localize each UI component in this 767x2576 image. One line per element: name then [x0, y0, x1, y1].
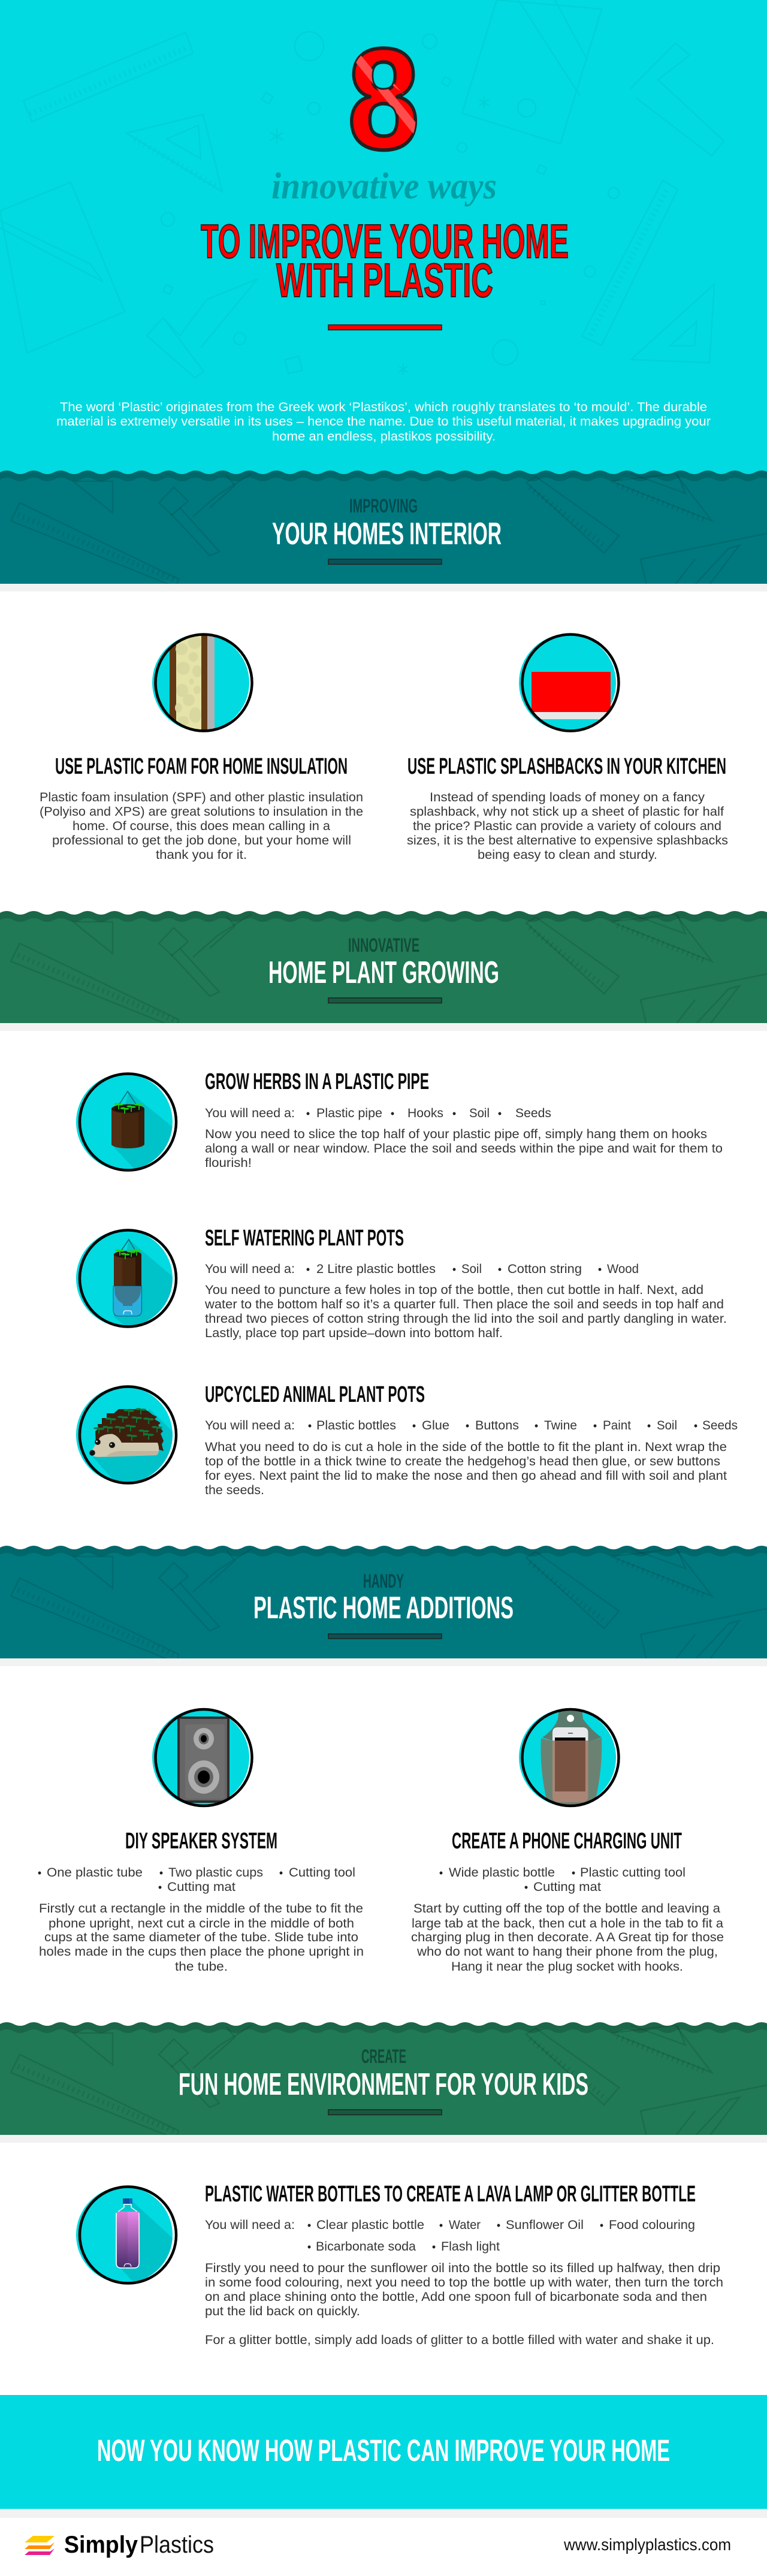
materials list: • [452, 1263, 456, 1275]
materials list: • [593, 1420, 597, 1432]
materials list: • [432, 2241, 436, 2253]
body text: cups at the same diameter of the tube. Slide tube into [44, 1931, 358, 1944]
body text: for eyes. Next paint the lid to make the nose and then go ahead and fill with soil and plant [205, 1469, 727, 1483]
logo wordmark [64, 2532, 214, 2558]
card: splashback text [407, 754, 728, 862]
body text: charging plug in then decorate. A A Great tip for those [411, 1931, 724, 1944]
card: phone charging text [411, 1829, 724, 1974]
section divider [328, 998, 442, 1003]
body text: thank you for it. [156, 848, 247, 862]
text: grow herbs [205, 1069, 723, 1170]
body text: phone upright, next cut a circle in the middle of both [49, 1917, 354, 1931]
materials list: Paint [603, 1419, 631, 1432]
panel: section header handy [0, 1546, 767, 1666]
materials list: • [159, 1867, 163, 1879]
section label: INNOVATIVE [348, 934, 419, 956]
materials list: You will need a: [205, 1262, 295, 1276]
icon: speaker [152, 1709, 252, 1806]
materials list: Buttons [475, 1419, 519, 1432]
text: lava lamp [205, 2182, 723, 2347]
materials list: Twine [544, 1419, 577, 1432]
materials list: • [524, 1881, 528, 1893]
materials list: You will need a: [205, 1106, 295, 1120]
materials list: • [498, 1263, 502, 1275]
section label: CREATE [361, 2046, 406, 2067]
card: foam insulation text [40, 754, 363, 862]
materials list: You will need a: [205, 1419, 295, 1432]
icon: splashback [515, 634, 623, 731]
materials list: Bicarbonate soda [316, 2240, 416, 2254]
materials list: Hooks [407, 1106, 443, 1120]
body text: along a wall or near window. Place the soil and seeds within the pipe and wait for them to [205, 1142, 723, 1156]
heading: GROW HERBS IN A PLASTIC PIPE [205, 1069, 429, 1094]
materials list: Soil [657, 1419, 677, 1432]
heading: SELF WATERING PLANT POTS [205, 1226, 404, 1251]
intro text [56, 400, 711, 444]
body text: Hang it near the plug socket with hooks. [451, 1960, 683, 1974]
body text: the seeds. [205, 1483, 264, 1497]
icon: logo mark [25, 2536, 55, 2555]
body text: who do not want to hang their phone from the plug, [416, 1945, 718, 1959]
section label: HANDY [363, 1570, 404, 1592]
materials list: • [535, 1420, 538, 1432]
materials list: • [572, 1867, 575, 1879]
body text: flourish! [205, 1156, 252, 1170]
section divider [328, 559, 442, 565]
section divider [328, 1634, 442, 1639]
body text: Now you need to slice the top half of your plastic pipe off, simply hang them on hooks [205, 1127, 707, 1141]
section divider [328, 2110, 442, 2115]
materials list: • [600, 2219, 603, 2231]
panel: section header improving [0, 470, 767, 592]
body text: on and place shining onto the bottle, Add one spoon full of bicarbonate soda and then [205, 2290, 707, 2304]
materials list: Clear plastic bottle [316, 2218, 424, 2232]
body text: put the lid back on quickly. [205, 2304, 360, 2318]
title divider [328, 325, 442, 330]
body text: Instead of spending loads of money on a fancy [430, 791, 705, 804]
body text [205, 1127, 723, 1170]
number 8: 8 [348, 19, 419, 179]
body text: You need to puncture a few holes in top of the bottle, then cut bottle in half. Next, add [205, 1283, 703, 1297]
materials list: • [38, 1867, 41, 1879]
materials list: Plastic bottles [316, 1419, 396, 1432]
materials list: Wood [607, 1262, 639, 1276]
icon: foam insulation [152, 629, 252, 737]
body text [204, 1283, 727, 1340]
body text: being easy to clean and sturdy. [478, 848, 657, 862]
body text: thread two pieces of cotton string through the lid into the soil and partly dangling in water. [205, 1312, 727, 1326]
materials list: • [158, 1881, 162, 1893]
body text: Plastic foam insulation (SPF) and other plastic insulation [40, 791, 363, 804]
materials list: Cutting mat [167, 1880, 235, 1894]
logo wordmark: Plastics [140, 2532, 214, 2558]
heading: DIY SPEAKER SYSTEM [125, 1829, 277, 1854]
body text: large tab at the back, then cut a hole in the tab to fit a [412, 1917, 723, 1931]
materials list: Food colouring [609, 2218, 695, 2232]
text: upcycled animal pots [205, 1382, 738, 1497]
body text [205, 2261, 723, 2347]
number 8 [350, 46, 417, 152]
body text: Lastly, place top part upside–down into bottom half. [205, 1326, 503, 1340]
heading: USE PLASTIC FOAM FOR HOME INSULATION [55, 754, 348, 779]
body text [411, 1902, 724, 1974]
body text: in some food colouring, next you need to top the bottle up with water, then turn the torch [205, 2276, 723, 2290]
heading: UPCYCLED ANIMAL PLANT POTS [205, 1382, 425, 1407]
section title: PLASTIC HOME ADDITIONS [253, 1591, 514, 1625]
body text: home. Of course, this does mean calling in a [73, 819, 330, 833]
body text: What you need to do is cut a hole in the side of the bottle to fit the plant in. Next wrap the [205, 1440, 727, 1454]
materials list: • [391, 1108, 394, 1120]
body text [40, 791, 363, 862]
materials list: Seeds [702, 1419, 738, 1432]
materials list: • [306, 1108, 310, 1120]
section label: IMPROVING [349, 495, 418, 517]
materials list: Wide plastic bottle [449, 1866, 555, 1880]
materials list: Flash light [441, 2240, 500, 2254]
materials list [205, 1106, 551, 1120]
section title: YOUR HOMES INTERIOR [272, 517, 502, 551]
body text: Firstly you need to pour the sunflower oil into the bottle so its filled up halfway, then drip [205, 2261, 720, 2275]
materials list: • [307, 2241, 311, 2253]
materials list: • [308, 1420, 312, 1432]
materials list [38, 1866, 355, 1894]
materials list: • [497, 2219, 500, 2231]
icon: phone charging holder [519, 1708, 618, 1807]
materials list: Cutting mat [533, 1880, 601, 1894]
section title: HOME PLANT GROWING [268, 955, 499, 990]
body text: professional to get the job done, but your home will [52, 834, 351, 847]
body text: (Polyiso and XPS) are great solutions to insulation in the [40, 805, 363, 819]
panel: section header create [0, 2022, 767, 2143]
materials list: • [466, 1420, 469, 1432]
body text: Firstly cut a rectangle in the middle of the tube to fit the [39, 1902, 363, 1916]
materials list [205, 1419, 738, 1432]
materials list: Water [449, 2218, 481, 2232]
card: speaker text [38, 1829, 364, 1974]
materials list: • [694, 1420, 697, 1432]
materials list: Sunflower Oil [506, 2218, 584, 2232]
title: WITH PLASTIC [276, 254, 493, 307]
materials list: • [647, 1420, 651, 1432]
materials list: • [307, 2219, 311, 2231]
materials list: • [439, 2219, 443, 2231]
materials list: Seeds [515, 1106, 551, 1120]
materials list: • [598, 1263, 602, 1275]
body text: top of the bottle in a thick twine to create the hedgehog’s head then glue, or sew buttons [205, 1455, 720, 1468]
body text: the tube. [175, 1960, 228, 1974]
materials list: One plastic tube [47, 1866, 143, 1880]
body text: splashback, why not stick up a sheet of plastic for half [410, 805, 724, 819]
body text: Start by cutting off the top of the bottle and leaving a [413, 1902, 720, 1916]
body text: sizes, it is the best alternative to expensive splashbacks [407, 834, 728, 847]
materials list: Plastic pipe [316, 1106, 382, 1120]
text: self watering pots [204, 1226, 727, 1340]
materials list [205, 2218, 695, 2254]
materials list: 2 Litre plastic bottles [316, 1262, 436, 1276]
icon: self watering pot [76, 1230, 180, 1334]
materials list: Cutting tool [289, 1866, 355, 1880]
website url: www.simplyplastics.com [563, 2535, 731, 2554]
materials list: • [306, 1263, 310, 1275]
materials list: • [279, 1867, 283, 1879]
icon: hanging pipe [76, 1074, 180, 1175]
panel: section header innovative [0, 911, 767, 1031]
panel: closing banner [0, 2395, 767, 2518]
materials list: • [439, 1867, 443, 1879]
materials list: Cotton string [508, 1262, 582, 1276]
materials list: Plastic cutting tool [580, 1866, 686, 1880]
logo wordmark: Simply [64, 2532, 138, 2558]
materials list: • [452, 1108, 456, 1120]
body text: For a glitter bottle, simply add loads of glitter to a bottle filled with water and shake it up. [205, 2333, 714, 2347]
materials list: Two plastic cups [168, 1866, 263, 1880]
body text [39, 1902, 364, 1974]
materials list: • [412, 1420, 416, 1432]
materials list: Soil [469, 1106, 490, 1120]
icon: hedgehog pot [76, 1387, 180, 1486]
materials list [439, 1866, 686, 1894]
title [201, 215, 569, 307]
materials list: Soil [461, 1262, 482, 1276]
panel: hero [0, 0, 767, 479]
body text [407, 791, 728, 862]
body text [205, 1440, 727, 1497]
icon: bottle lava lamp [76, 2186, 180, 2287]
materials list: • [498, 1108, 502, 1120]
intro text: material is extremely versatile in its uses – hence the name. Due to this useful material, it makes upgrading your [56, 415, 711, 429]
intro text: The word ‘Plastic’ originates from the Greek work ‘Plastikos’, which roughly translates to ‘to mould’. The durable [60, 400, 707, 414]
body text: holes made in the cups then place the phone upright in [39, 1945, 364, 1959]
footer [25, 2532, 731, 2558]
intro text: home an endless, plastikos possibility. [272, 430, 496, 444]
materials list: Glue [422, 1419, 449, 1432]
materials list [205, 1262, 639, 1276]
body text: the price? Plastic can provide a variety of colours and [413, 819, 721, 833]
body text: water to the bottom half so it’s a quarter full. Then place the soil and seeds in top half and [204, 1298, 724, 1311]
materials list: You will need a: [205, 2218, 295, 2232]
script subtitle: innovative ways [271, 166, 497, 207]
